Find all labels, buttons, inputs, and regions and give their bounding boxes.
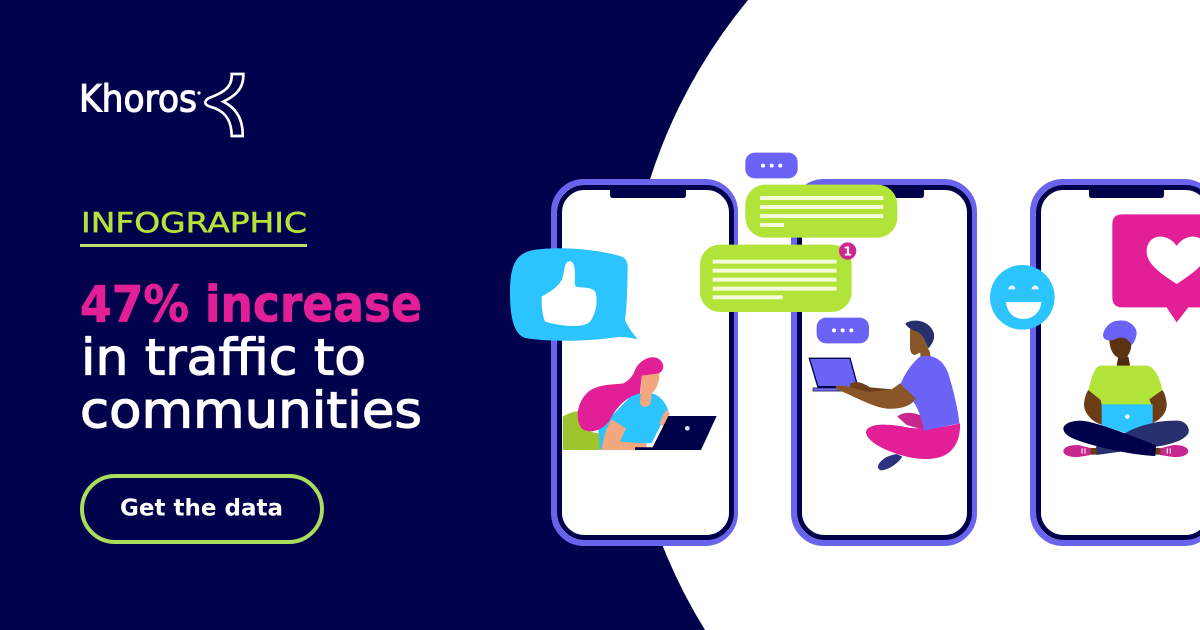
phone 3 — [1033, 182, 1200, 543]
figure: person seated cross-legged — [1063, 321, 1189, 457]
phone 2 — [794, 182, 974, 543]
icon: smiley — [990, 265, 1055, 330]
logo: Khoros — [79, 74, 243, 136]
message bubble: green upper — [745, 185, 897, 238]
button: Get the data: Get the data — [120, 494, 283, 522]
icon: thumbs up bubble — [510, 248, 637, 341]
white background curve — [624, 0, 1200, 630]
label: INFOGRAPHIC: INFOGRAPHIC — [81, 207, 307, 239]
button: Get the data — [82, 476, 322, 542]
message bubble: green lower with badge: 1 — [843, 244, 852, 259]
figure: woman with laptop — [563, 357, 717, 450]
chat bubble: typing lower — [817, 318, 869, 343]
message bubble: green lower with badge — [700, 242, 856, 312]
headline: communities — [80, 382, 422, 440]
figure: man with laptop — [809, 321, 960, 470]
headline: 47% increase — [80, 276, 422, 334]
icon: heart bubble — [1112, 214, 1200, 322]
headline — [80, 276, 422, 440]
chat bubble: typing top — [745, 153, 798, 178]
headline: in traffic to — [81, 328, 366, 386]
phone 1 — [554, 182, 735, 543]
label: INFOGRAPHIC — [80, 207, 307, 247]
logo: Khoros: Khoros — [79, 78, 197, 120]
